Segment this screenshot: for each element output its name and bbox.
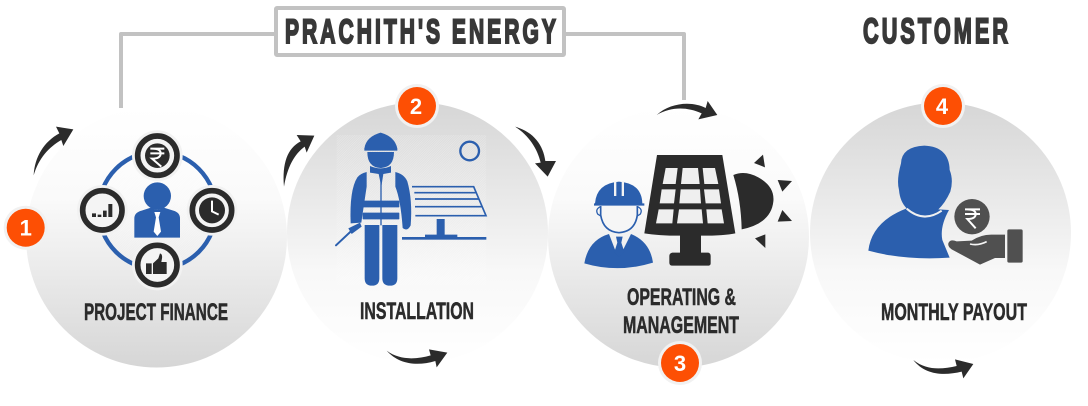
label: installation: INSTALLATION (360, 298, 474, 325)
panel: project finance (26, 106, 287, 368)
icon: finance ring with person (77, 130, 237, 290)
arrow: below monthly payout (913, 359, 973, 378)
panel: operating and management (548, 106, 809, 368)
label: operating and management (623, 284, 739, 339)
badge 1: 1 (20, 216, 32, 240)
arrow: finance to installation start (34, 127, 73, 175)
badge 2: 2 (410, 94, 422, 119)
connector line (121, 34, 684, 108)
label: operating and management: OPERATING & (627, 284, 736, 311)
arrow: above operating (657, 101, 717, 119)
arrow: into installation (284, 135, 314, 187)
label: project finance: PROJECT FINANCE (84, 299, 228, 326)
panel: monthly payout (810, 102, 1071, 364)
icon: worker with solar panel (336, 133, 486, 286)
arrow: below installation (387, 349, 447, 367)
heading: Customer: CUSTOMER (863, 13, 1008, 51)
panel: installation (287, 102, 548, 364)
badge 2 (395, 84, 439, 128)
arrow: installation to operating (515, 127, 556, 177)
badge 4 (921, 84, 965, 128)
badge 1 (4, 206, 48, 250)
badge 3: 3 (674, 351, 686, 376)
badge 4: 4 (936, 94, 949, 119)
icon: customer receiving rupee (868, 146, 1023, 265)
label: operating and management: MANAGEMENT (623, 312, 739, 339)
badge 3 (658, 341, 702, 385)
icon: engineer, solar panel and sun (584, 155, 792, 268)
title: Prachith's Energy: PRACHITH'S ENERGY (285, 12, 556, 50)
